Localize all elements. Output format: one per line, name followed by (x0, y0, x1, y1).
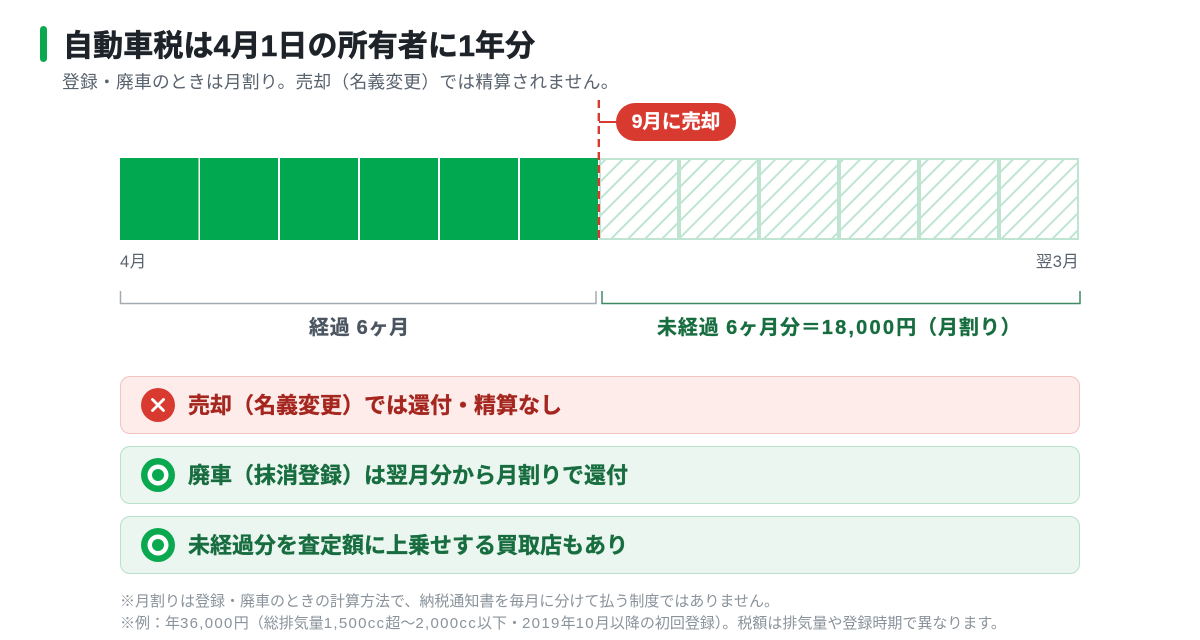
label: end month: 翌3月 (1036, 253, 1079, 271)
icon: circle (141, 528, 175, 562)
panel: scrapping refund (120, 446, 1080, 504)
text: buyers add: 未経過分を査定額に上乗せする買取店もあり (188, 533, 628, 558)
remaining months (600, 159, 1078, 239)
label: start month: 4月 (120, 253, 147, 271)
footnote 2: ※例：年36,000円（総排気量1,500cc超〜2,000cc以下・2019年10月以降の初回登録）。税額は排気量や登録時期で異なります。 (120, 615, 1006, 632)
icon: circle (141, 458, 175, 492)
panel: buyers add (120, 516, 1080, 574)
label: remaining: 未経過 6ヶ月分＝18,000円（月割り） (657, 317, 1022, 339)
text: sale no refund: 売却（名義変更）では還付・精算なし (188, 393, 562, 418)
icon: cross (141, 388, 175, 422)
subtitle: 登録・廃車のときは月割り。売却（名義変更）では精算されません。 (62, 72, 619, 92)
sale badge: 9月に売却 (632, 111, 720, 133)
footnote 1: ※月割りは登録・廃車のときの計算方法で、納税通知書を毎月に分けて払う制度ではありません。 (120, 593, 779, 610)
label: elapsed: 経過 6ヶ月 (309, 317, 410, 339)
sale marker line (599, 100, 618, 243)
text: scrapping refund: 廃車（抹消登録）は翌月分から月割りで還付 (188, 463, 628, 488)
panel: sale no refund (120, 376, 1080, 434)
bracket: remaining (602, 291, 1080, 304)
sale badge (616, 103, 736, 141)
title: 自動車税は4月1日の所有者に1年分 (63, 30, 535, 63)
bracket: elapsed (120, 291, 596, 304)
title accent bar (40, 26, 47, 62)
timeline chart (120, 100, 1081, 304)
elapsed months (120, 158, 598, 240)
